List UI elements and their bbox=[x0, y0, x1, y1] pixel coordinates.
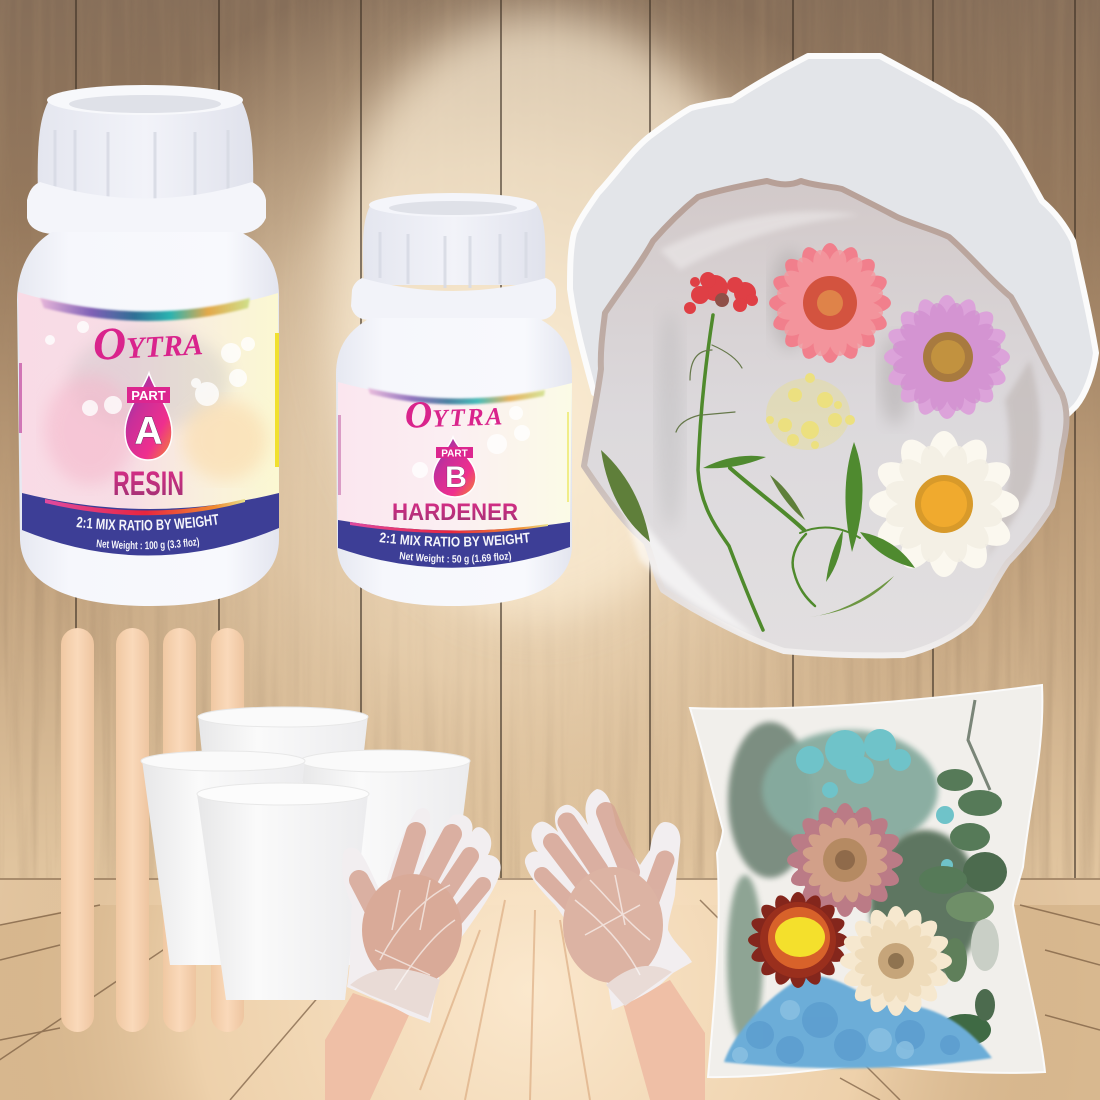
band B bbox=[338, 520, 570, 568]
flower: red and yellow bbox=[748, 892, 848, 988]
brand A: OYTRA bbox=[92, 313, 204, 370]
wooden floor bbox=[0, 878, 1100, 1100]
resin coaster with pressed flowers bbox=[584, 181, 1066, 655]
part B badge bbox=[433, 437, 476, 497]
flower: red sprig bbox=[684, 272, 758, 314]
bottle A: resin bbox=[17, 85, 280, 606]
body B bbox=[336, 318, 572, 606]
band A bbox=[22, 493, 279, 556]
label B bbox=[338, 382, 572, 531]
left gloved hand bbox=[325, 808, 501, 1100]
part A badge bbox=[125, 373, 172, 460]
part A badge: PART bbox=[131, 388, 166, 403]
flower: lilac daisy bbox=[883, 293, 1011, 421]
hardener word: HARDENER bbox=[392, 499, 518, 526]
cap B bbox=[351, 193, 556, 320]
stems and leaves bbox=[676, 315, 860, 630]
label A bbox=[18, 292, 279, 510]
band A: 2:1 MIX RATIO BY WEIGHT bbox=[76, 514, 218, 530]
cap A bbox=[27, 85, 266, 234]
band B: 2:1 MIX RATIO BY WEIGHT bbox=[379, 532, 530, 547]
wooden stirring sticks bbox=[61, 628, 244, 1032]
band A: Net Weight : 100 g (3.3 floz) bbox=[96, 537, 200, 552]
flower: mauve bbox=[787, 803, 903, 917]
resin word: RESIN bbox=[113, 465, 184, 503]
band B: Net Weight : 50 g (1.69 floz) bbox=[400, 552, 512, 564]
body A bbox=[17, 232, 279, 606]
paper cups bbox=[141, 707, 470, 1000]
blue hydrangea bbox=[724, 975, 992, 1068]
flower: yellow lace bbox=[766, 373, 855, 450]
sprigs bbox=[727, 700, 1007, 1046]
bottle B: hardener bbox=[336, 193, 572, 606]
brand B: OYTRA bbox=[404, 391, 505, 437]
right gloved hand bbox=[525, 789, 705, 1100]
flower: cream bbox=[840, 906, 952, 1016]
eucalyptus bbox=[919, 700, 1007, 1046]
flower: pink daisy bbox=[767, 240, 893, 366]
flower: white daisy bbox=[869, 431, 1019, 577]
part B badge: B bbox=[445, 461, 467, 494]
bag of dried flowers bbox=[690, 685, 1045, 1077]
part B badge: PART bbox=[441, 448, 468, 460]
part A badge: A bbox=[134, 410, 163, 453]
white silicone mould bbox=[570, 56, 1096, 480]
